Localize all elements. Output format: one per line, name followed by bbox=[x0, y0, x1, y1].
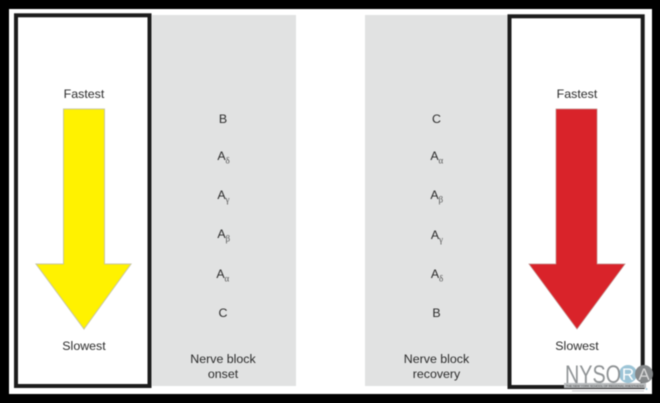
onset order: A gamma: γ bbox=[224, 194, 230, 204]
onset label bbox=[190, 352, 257, 381]
recovery label bbox=[404, 352, 470, 381]
recovery order: A delta bbox=[431, 267, 443, 284]
logo: NYSORA: NYSO bbox=[565, 361, 621, 389]
onset order: A delta: A bbox=[217, 149, 226, 163]
recovery order: A delta: A bbox=[431, 267, 440, 281]
onset order: A gamma bbox=[217, 188, 230, 204]
onset order: A beta: β bbox=[226, 234, 230, 244]
label: fastest: Fastest bbox=[557, 87, 598, 101]
onset label: onset bbox=[208, 367, 239, 381]
label: fastest: Fastest bbox=[64, 87, 105, 101]
logo: NYSORA: THE NEW YORK SCHOOL OF REGIONAL ANESTHESIA bbox=[566, 384, 644, 388]
onset order: A delta bbox=[217, 149, 230, 166]
recovery order: A delta: δ bbox=[439, 274, 443, 284]
recovery order: A gamma: γ bbox=[438, 234, 443, 244]
recovery order: A beta: β bbox=[438, 194, 444, 204]
arrow: red downward bbox=[529, 109, 625, 329]
onset order: A alpha bbox=[216, 267, 230, 284]
onset order: A beta bbox=[217, 227, 230, 244]
onset order: A alpha: A bbox=[216, 267, 225, 281]
onset order: A alpha: α bbox=[224, 274, 230, 284]
recovery order: A gamma: A bbox=[431, 228, 440, 242]
recovery order: B: B bbox=[432, 306, 441, 320]
onset order: A delta: δ bbox=[226, 156, 230, 166]
panel: left speed box bbox=[16, 15, 150, 386]
onset label: Nerve block bbox=[190, 352, 257, 366]
recovery order: A alpha: A bbox=[430, 149, 439, 163]
recovery order: C: C bbox=[432, 112, 441, 126]
recovery order: A gamma bbox=[431, 228, 443, 244]
arrow: yellow downward bbox=[36, 109, 131, 329]
onset order: B: B bbox=[219, 112, 227, 126]
panel: nerve block onset bbox=[152, 15, 296, 386]
logo: NYSORA: A bbox=[638, 365, 650, 384]
onset order: A beta: A bbox=[217, 227, 226, 241]
recovery order: A beta: A bbox=[430, 188, 439, 202]
recovery order: A alpha bbox=[430, 149, 444, 166]
onset order: C: C bbox=[219, 306, 228, 320]
panel: right speed box bbox=[510, 16, 643, 387]
label: slowest: Slowest bbox=[62, 339, 106, 353]
recovery label: Nerve block bbox=[404, 352, 470, 366]
logo: NYSORA: R bbox=[622, 365, 634, 384]
recovery order: A beta bbox=[430, 188, 444, 204]
onset order: A gamma: A bbox=[217, 188, 226, 202]
recovery label: recovery bbox=[413, 367, 461, 381]
recovery order: A alpha: α bbox=[438, 156, 444, 166]
panel: nerve block recovery bbox=[365, 15, 508, 386]
label: slowest: Slowest bbox=[555, 339, 599, 353]
